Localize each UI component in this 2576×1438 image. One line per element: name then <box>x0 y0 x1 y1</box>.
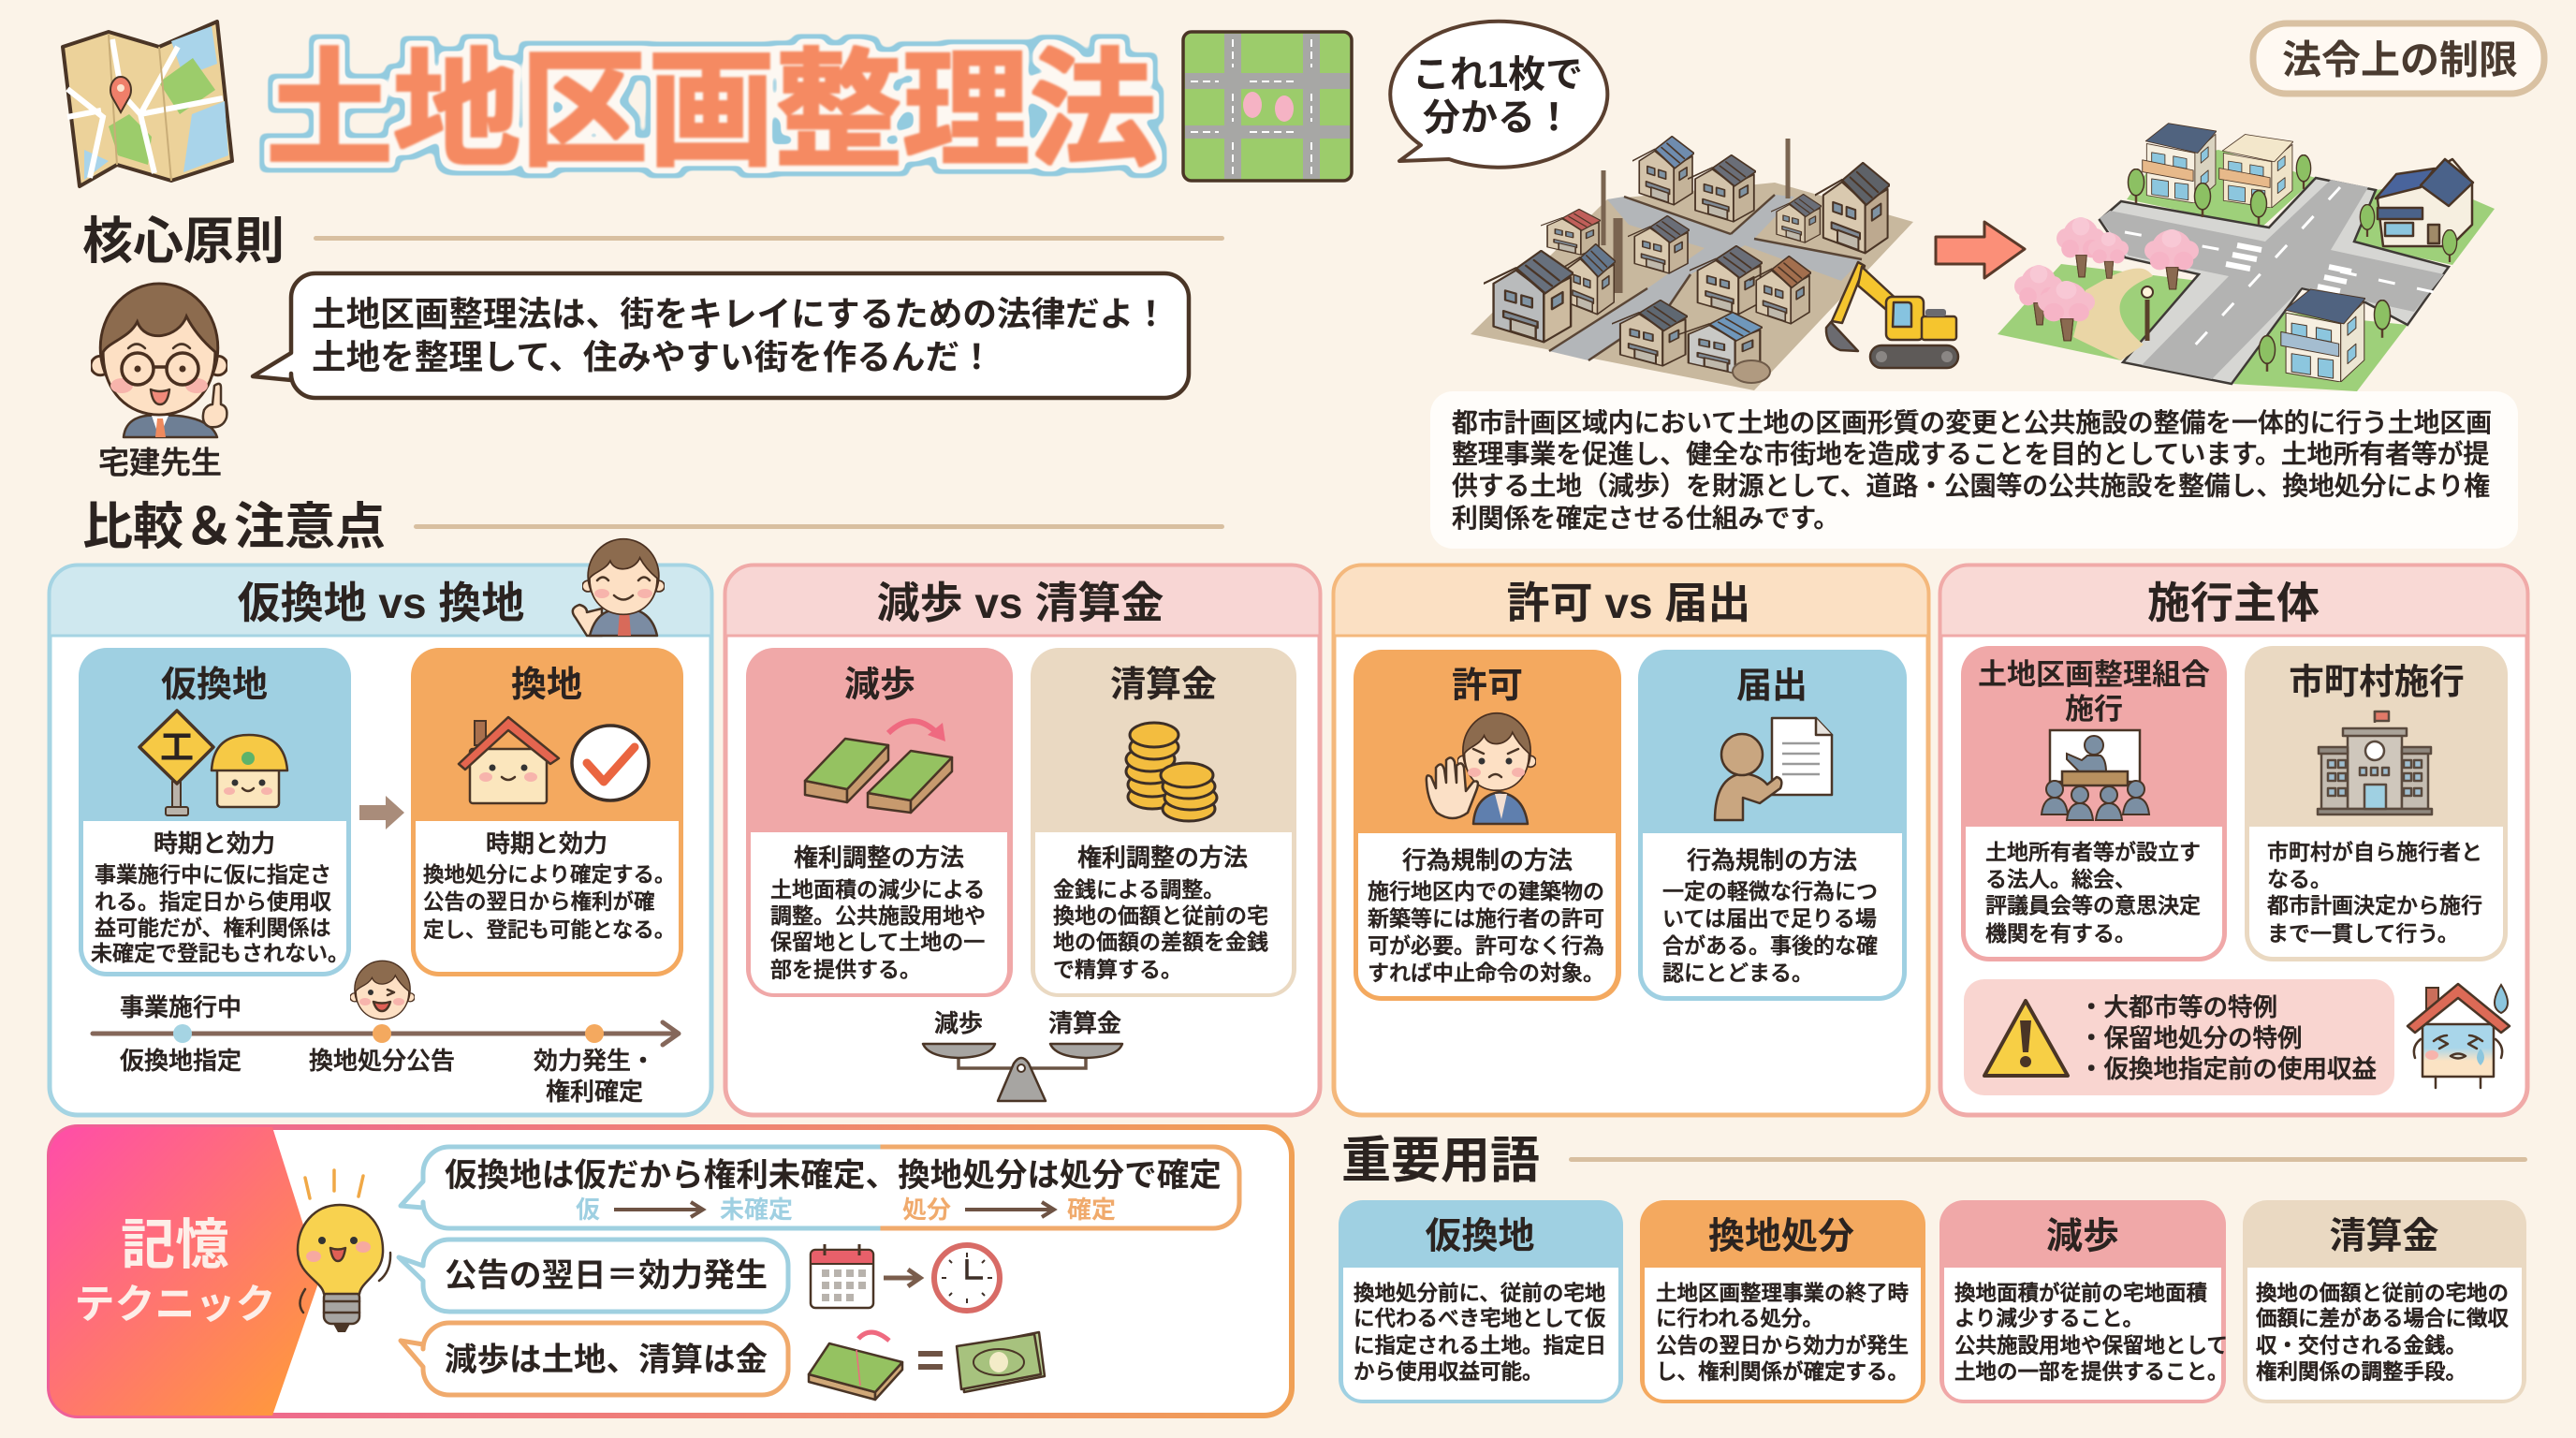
card: 届出: 届出 <box>1736 667 1808 706</box>
card: term 仮換地 <box>1339 1200 1623 1403</box>
heading: 比較＆注意点 <box>82 499 1224 555</box>
speech bubble: これ1枚で分かる！: これ1枚で <box>1412 54 1583 95</box>
card: 換地: 換地 <box>511 666 582 705</box>
card: 届出: 行為規制の方法 <box>1687 846 1857 874</box>
card: term 清算金: 清算金 <box>2329 1217 2439 1256</box>
card: 市町村施行: 市町村施行 <box>2289 662 2465 701</box>
card: term 清算金 <box>2243 1200 2526 1403</box>
card: term 換地処分: し、権利関係が確定する。 <box>1656 1359 1909 1384</box>
callout: 特例: ・保留地処分の特例 <box>2079 1024 2303 1052</box>
heading: 重要用語: 重要用語 <box>1341 1133 1540 1189</box>
timeline: 事業施行中 <box>120 993 242 1021</box>
card: term 仮換地: に指定される土地。指定日 <box>1354 1333 1606 1357</box>
label: 清算金 on scale: 清算金 <box>1048 1009 1121 1037</box>
speech bubble: core principle: 土地区画整理法は、街をキレイにするための法律だよ！ <box>312 294 1168 333</box>
card: 減歩: 土地面積の減少による <box>770 877 985 902</box>
timeline: 換地処分公告 <box>309 1047 455 1075</box>
label: 減歩 on scale: 減歩 <box>934 1009 983 1037</box>
card: term 減歩: 換地面積が従前の宅地面積 <box>1954 1281 2207 1305</box>
card: 減歩: 保留地として土地の一 <box>770 930 985 954</box>
icon: construction sign and hard hat <box>139 711 287 815</box>
bubble: 公告の翌日 <box>399 1240 788 1312</box>
card: 減歩: 権利調整の方法 <box>794 844 964 872</box>
icon: land plots with arrow <box>805 721 952 813</box>
icon: warning triangle <box>1984 1001 2068 1076</box>
ribbon: 記憶テクニック: テクニック <box>75 1283 275 1328</box>
card: 仮換地: 益可能だが、権利関係は <box>95 916 331 940</box>
card: term 換地処分: 公告の翌日から効力が発生 <box>1656 1333 1909 1357</box>
icon: person with stop hand <box>1427 713 1536 824</box>
panel: 許可 vs 届出 <box>1334 565 1928 1115</box>
bubble: 仮換地 mnemonic: 仮換地は仮だから権利未確定、換地処分は処分で確定 <box>445 1158 1222 1194</box>
bubble: 仮換地 mnemonic: 確定 <box>1067 1196 1116 1224</box>
speech bubble: core principle <box>253 273 1189 398</box>
card: 市町村施行 <box>2245 646 2508 961</box>
heading: 核心原則: 核心原則 <box>82 213 285 270</box>
card: 許可: 行為規制の方法 <box>1402 846 1573 874</box>
icon: folded map <box>63 22 232 186</box>
card: 減歩: 減歩 <box>844 666 915 705</box>
callout: 特例 <box>1964 979 2394 1095</box>
text block: overview: 利関係を確定させる仕組みです。 <box>1452 504 1839 532</box>
heading: 核心原則 <box>82 213 1224 270</box>
icon: assembly meeting <box>2042 730 2149 820</box>
card: 換地 <box>411 648 683 976</box>
card: term 減歩: 減歩 <box>2046 1217 2119 1256</box>
card: term 換地処分 <box>1640 1200 1925 1403</box>
speech bubble: これ1枚で分かる！ <box>1390 22 1607 168</box>
callout: 特例: ・大都市等の特例 <box>2079 993 2277 1021</box>
card: term 減歩: 土地の一部を提供すること。 <box>1954 1359 2229 1384</box>
card: 仮換地 <box>79 648 351 976</box>
heading: 重要用語 <box>1341 1133 2527 1189</box>
heading: 比較＆注意点: 比較＆注意点 <box>82 499 386 555</box>
panel: 施行主体 <box>1940 565 2527 1115</box>
bubble: 減歩は土地 <box>401 1323 788 1395</box>
card: 清算金 <box>1031 648 1296 997</box>
badge: 法令上の制限 <box>2253 23 2544 94</box>
panel: 仮換地 vs 換地 <box>50 539 711 1115</box>
card: 市町村施行: 市町村が自ら施行者と <box>2267 840 2482 864</box>
card: term 仮換地: から使用収益可能。 <box>1354 1359 1544 1384</box>
card: 清算金: 清算金 <box>1110 666 1217 705</box>
timeline: 仮換地指定 <box>120 1047 242 1075</box>
card: 許可: すれば中止命令の対象。 <box>1368 961 1604 985</box>
equals sign <box>918 1354 943 1367</box>
ribbon: 記憶テクニック: 記憶 <box>121 1215 229 1275</box>
card: term 減歩: 公共施設用地や保留地として <box>1954 1333 2228 1357</box>
icon: land plot <box>809 1332 902 1400</box>
card: 許可: 新築等には施行者の許可 <box>1368 906 1604 931</box>
card: 土地区画整理組合施行: 土地所有者等が設立す <box>1985 840 2201 864</box>
card: 許可: 施行地区内での建築物の <box>1368 879 1604 903</box>
card: term 減歩: より減少すること。 <box>1954 1307 2144 1329</box>
panel: 記憶テクニック <box>50 1127 1292 1416</box>
card: 許可 <box>1354 650 1621 1001</box>
card: term 清算金: 権利関係の調整手段。 <box>2256 1359 2466 1384</box>
callout: 特例: ・仮換地指定前の使用収益 <box>2079 1055 2377 1083</box>
bubble: 仮換地 mnemonic: 仮 <box>576 1196 600 1224</box>
text block: overview <box>1430 391 2518 549</box>
icon: crying house <box>2408 984 2510 1088</box>
illustration: new town after readjustment <box>1998 124 2495 391</box>
card: 仮換地: 未確定で登記もされない。 <box>91 941 349 965</box>
card: 土地区画整理組合施行: 評議員会等の意思決定 <box>1985 893 2201 917</box>
text block: overview: 都市計画区域内において土地の区画形質の変更と公共施設の整備を一体的に行う土地区画 <box>1452 408 2492 436</box>
timeline: 効力発生・ <box>534 1047 655 1075</box>
speech bubble: core principle: 土地を整理して、住みやすい街を作るんだ！ <box>312 337 994 376</box>
illustration: excavator <box>1826 262 1958 368</box>
card: term 換地処分: に行われる処分。 <box>1656 1307 1823 1329</box>
card: 減歩 <box>746 648 1013 997</box>
card: 清算金: 金銭による調整。 <box>1053 877 1224 902</box>
icon: person submitting document <box>1715 718 1832 820</box>
card: 届出 <box>1638 650 1907 1001</box>
card: 届出: 合がある。事後的な確 <box>1662 933 1878 958</box>
icon: balance scale <box>923 1044 1122 1101</box>
card: term 仮換地: 換地処分前に、従前の宅地 <box>1354 1281 1605 1305</box>
card: 届出: 一定の軽微な行為につ <box>1662 879 1878 903</box>
card: 仮換地: 仮換地 <box>161 666 268 705</box>
card: 土地区画整理組合施行 <box>1961 646 2227 961</box>
card: 市町村施行: 都市計画決定から施行 <box>2267 893 2482 917</box>
card: term 換地処分: 土地区画整理事業の終了時 <box>1656 1281 1909 1305</box>
card: 清算金: で精算する。 <box>1053 957 1182 981</box>
card: 減歩: 調整。公共施設用地や <box>770 903 986 928</box>
icon: construction sign and hard hat: 工 <box>160 728 194 766</box>
card: 換地: 時期と効力 <box>486 829 607 858</box>
timeline: 権利確定 <box>546 1078 643 1106</box>
icon: light bulb mascot <box>298 1170 390 1332</box>
card: term 換地処分: 換地処分 <box>1708 1217 1854 1256</box>
card: 土地区画整理組合施行: る法人。総会、 <box>1985 867 2136 891</box>
arrow: 仮換地 to 換地 <box>359 796 404 829</box>
badge: 法令上の制限: 法令上の制限 <box>2282 37 2518 82</box>
card: 清算金: 地の価額の差額を金銭 <box>1053 930 1268 954</box>
panel title: 許可 vs 届出 <box>1507 579 1750 627</box>
character: winking child <box>350 961 415 1020</box>
card: 市町村施行: なる。 <box>2267 867 2332 891</box>
card: 土地区画整理組合施行: 機関を有する。 <box>1985 921 2136 946</box>
timeline <box>93 993 679 1106</box>
speech bubble: これ1枚で分かる！: 分かる！ <box>1423 97 1573 139</box>
card: 清算金: 権利調整の方法 <box>1077 844 1248 872</box>
card: 土地区画整理組合施行: 土地区画整理組合 <box>1978 657 2210 691</box>
bubble: 公告の翌日: 公告の翌日＝効力発生 <box>445 1258 768 1294</box>
card: term 清算金: 収・交付される金銭。 <box>2256 1333 2466 1357</box>
card: 許可: 許可 <box>1452 667 1523 706</box>
text block: overview: 供する土地（減歩）を財源として、道路・公園等の公共施設を整備し、換地処分により権 <box>1452 471 2490 500</box>
bubble: 減歩は土地: 減歩は土地、清算は金 <box>445 1343 768 1378</box>
card: term 仮換地: に代わるべき宅地として仮 <box>1354 1307 1606 1329</box>
bubble: 仮換地 mnemonic: 未確定 <box>720 1196 793 1224</box>
icon: city hall <box>2318 711 2432 814</box>
icon: clock <box>934 1245 1000 1311</box>
card: 土地区画整理組合施行: 施行 <box>2065 693 2123 725</box>
card: 届出: 認にとどまる。 <box>1662 961 1813 985</box>
bubble: 仮換地 mnemonic <box>401 1147 1239 1228</box>
panel title: 仮換地 vs 換地 <box>238 579 524 627</box>
illustration: old town before readjustment <box>1471 137 1913 390</box>
text block: overview: 整理事業を促進し、健全な市街地を造成することを目的としています。土地所有者等が提 <box>1452 439 2489 468</box>
icon: banknotes <box>957 1332 1045 1392</box>
card: 換地: 公告の翌日から権利が確 <box>423 889 655 914</box>
card: term 仮換地: 仮換地 <box>1425 1217 1535 1256</box>
character: waving <box>573 539 665 636</box>
card: 仮換地: 時期と効力 <box>154 829 275 858</box>
card: 許可: 可が必要。許可なく行為 <box>1368 933 1604 958</box>
card: 仮換地: 事業施行中に仮に指定さ <box>95 862 331 887</box>
card: term 清算金: 換地の価額と従前の宅地の <box>2256 1281 2509 1305</box>
icon: calendar <box>811 1244 873 1308</box>
label: 宅建先生: 宅建先生 <box>98 446 222 479</box>
character: 宅建先生 <box>91 284 227 437</box>
panel title: 減歩 vs 清算金 <box>877 579 1164 627</box>
card: 届出: いては届出で足りる場 <box>1662 906 1877 931</box>
arrow: before to after <box>1936 222 2025 278</box>
card: term 減歩 <box>1939 1200 2229 1403</box>
card: 換地: 定し、登記も可能となる。 <box>423 917 675 942</box>
ribbon: 記憶テクニック <box>50 1127 320 1416</box>
card: term 清算金: 価額に差がある場合に徴収 <box>2256 1307 2509 1329</box>
card: 仮換地: れる。指定日から使用収 <box>95 889 331 914</box>
title: 土地区画整理法 <box>266 39 1157 182</box>
card: 換地: 換地処分により確定する。 <box>423 863 676 886</box>
panel title: 施行主体 <box>2147 579 2320 627</box>
panel: 減歩 vs 清算金 <box>725 565 1320 1115</box>
card: 減歩: 部を提供する。 <box>770 957 921 981</box>
icon: coin stacks <box>1126 723 1217 821</box>
bubble: 仮換地 mnemonic: 処分 <box>902 1196 951 1224</box>
icon: street grid <box>1183 32 1352 181</box>
arrow: calendar to clock <box>884 1269 920 1286</box>
card: 市町村施行: まで一貫して行う。 <box>2267 921 2459 946</box>
card: 清算金: 換地の価額と従前の宅 <box>1053 903 1268 928</box>
icon: house with check <box>459 717 649 803</box>
